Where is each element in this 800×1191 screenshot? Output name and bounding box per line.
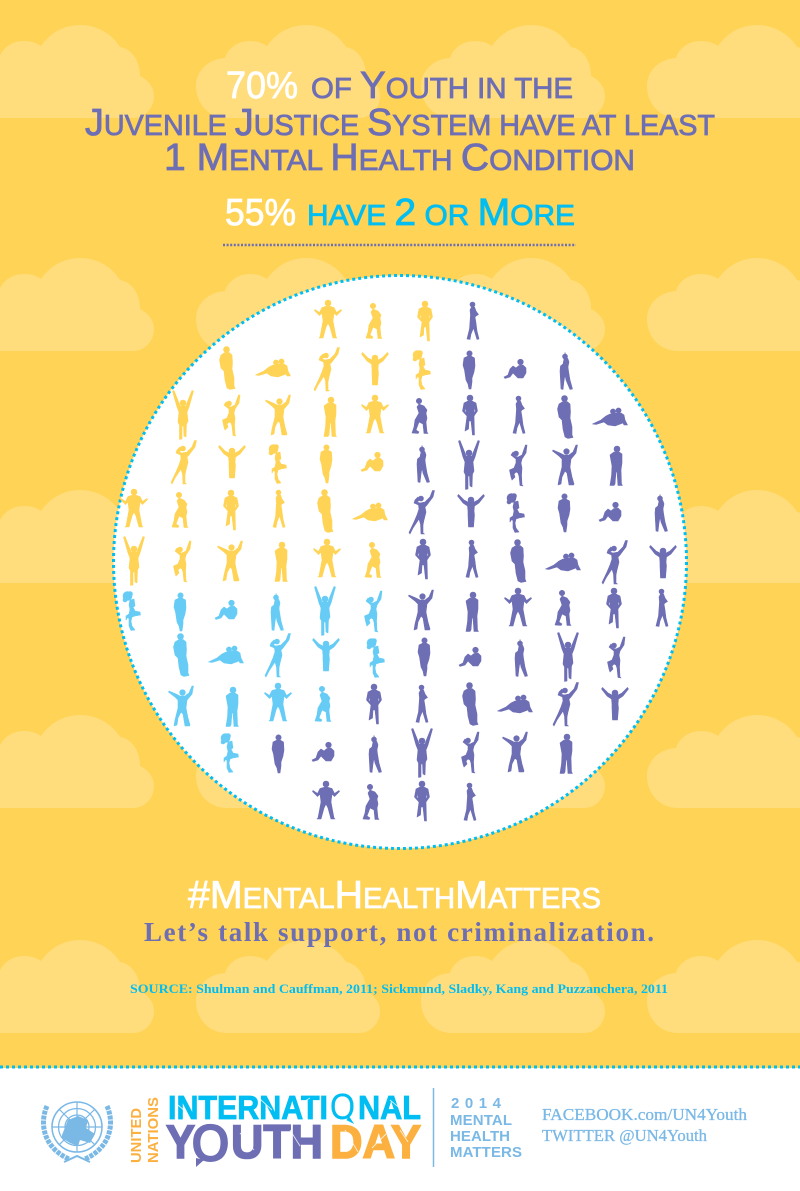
United Nations label xyxy=(129,1097,162,1163)
theme text: MATTERS xyxy=(450,1144,522,1161)
title line 3: 1 MENTAL HEALTH CONDITION xyxy=(164,137,635,179)
subtitle: 55% xyxy=(225,192,296,234)
theme text: HEALTH xyxy=(450,1128,510,1145)
hashtag heading: #MENTALHEALTHMATTERS xyxy=(188,874,601,917)
people chart: all figures xyxy=(120,300,676,821)
theme text xyxy=(450,1095,522,1161)
title xyxy=(85,65,715,234)
theme text: MENTAL xyxy=(450,1112,512,1129)
divider xyxy=(432,1088,434,1167)
United Nations label: NATIONS xyxy=(146,1097,162,1163)
Youth wordmark: O xyxy=(191,1114,230,1174)
International wordmark: O xyxy=(330,1086,355,1127)
social links: FACEBOOK.com/UN4Youth xyxy=(542,1105,747,1124)
yellow figures xyxy=(120,300,432,586)
icon: UN emblem xyxy=(43,1102,111,1162)
circle panel xyxy=(114,276,686,848)
light blue figures xyxy=(123,586,384,772)
title line 1: 70% xyxy=(226,65,298,107)
source: SOURCE: Shulman and Cauffman, 2011; Sickmund, Sladky, Kang and Puzzanchera, 2011 xyxy=(130,982,668,996)
footer panel xyxy=(0,1067,800,1191)
theme text: 2014 xyxy=(451,1095,502,1112)
title line 1: OF YOUTH IN THE xyxy=(311,65,573,107)
subtitle: HAVE 2 OR MORE xyxy=(307,192,575,234)
International wordmark: NAL xyxy=(358,1090,421,1127)
Youth wordmark xyxy=(166,1114,323,1174)
United Nations label: UNITED xyxy=(129,1108,145,1163)
International wordmark: INTERNATI xyxy=(168,1090,328,1127)
Day wordmark: DAY xyxy=(330,1115,421,1168)
International wordmark xyxy=(168,1086,421,1127)
purple figures xyxy=(272,302,676,821)
title line 2: JUVENILE JUSTICE SYSTEM HAVE AT LEAST xyxy=(85,102,715,144)
Youth wordmark: UTH xyxy=(231,1115,323,1168)
tagline: Let’s talk support, not criminalization. xyxy=(144,917,654,947)
social links xyxy=(542,1105,747,1145)
social links: TWITTER @UN4Youth xyxy=(542,1126,707,1145)
logo: International Youth Day xyxy=(129,1086,421,1174)
Youth wordmark: Y xyxy=(166,1115,195,1168)
